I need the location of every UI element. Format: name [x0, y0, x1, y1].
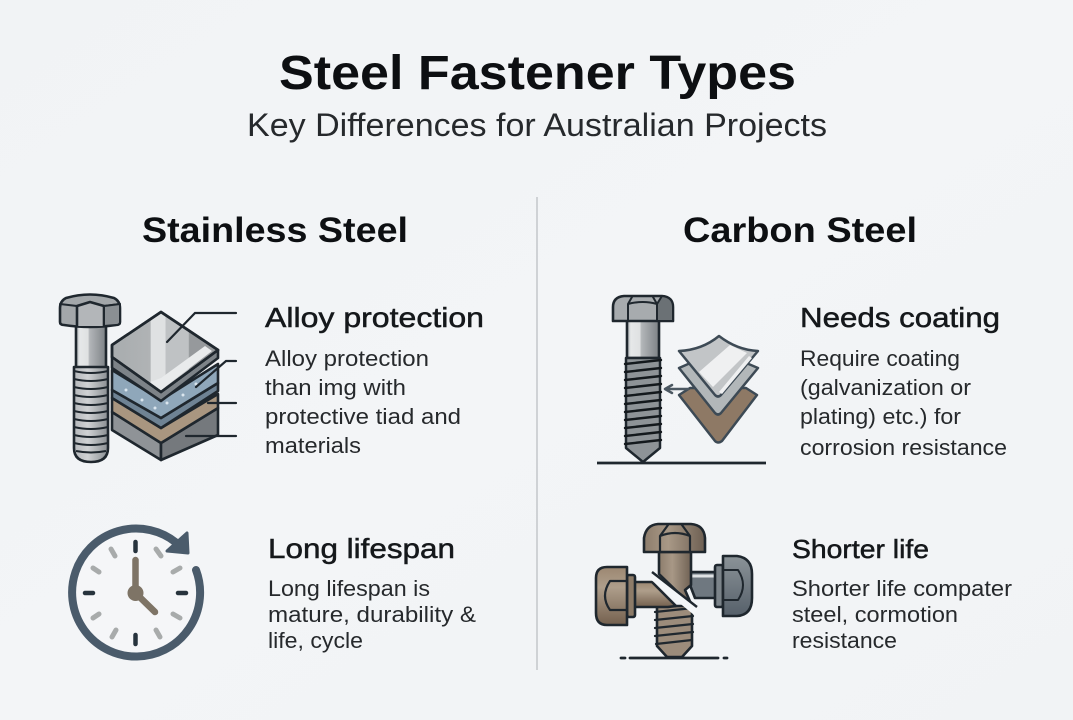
text block: needs coating: (galvanization or [800, 375, 971, 400]
text block: shorter life: steel, cormotion [792, 602, 958, 627]
text block: needs coating: plating) etc.) for [800, 404, 961, 429]
bolt head [60, 294, 120, 327]
panel: carbon steel [596, 211, 1012, 658]
heading: carbon steel: Carbon Steel [683, 211, 917, 250]
text block: alloy protection [265, 302, 484, 458]
text block: needs coating: Needs coating [800, 302, 1000, 333]
ground line [597, 462, 766, 464]
text block: long lifespan: mature, durability & [268, 602, 476, 627]
arrow [665, 385, 688, 393]
vertical bolt shank [659, 552, 692, 606]
text block: needs coating: corrosion resistance [800, 435, 1007, 460]
subtitle: Key Differences for Australian Projects [247, 107, 827, 143]
icon: stainless bolt and layered material [60, 294, 236, 462]
callout lines [167, 313, 236, 436]
text block: needs coating: Require coating [800, 346, 960, 371]
blue layer sparkles [124, 382, 198, 410]
icon: carbon bolt with coating sheets [597, 296, 766, 463]
text block: alloy protection: than img with [265, 375, 406, 400]
text block: shorter life [792, 534, 1012, 653]
text block: long lifespan: Long lifespan [268, 533, 455, 564]
diagonal slash [652, 576, 696, 612]
bolt head [613, 296, 673, 321]
coating sheets [679, 336, 758, 442]
text block: alloy protection: Alloy protection [265, 346, 429, 371]
panel: stainless steel [60, 211, 484, 657]
text block: long lifespan: Long lifespan is [268, 576, 430, 601]
right grey bolt [685, 556, 752, 616]
material layers [112, 312, 218, 460]
heading: stainless steel: Stainless Steel [142, 211, 408, 250]
icon: clock with circular arrow [72, 529, 200, 657]
bolt shank and thread [74, 326, 108, 462]
text block: alloy protection: materials [265, 433, 361, 458]
text block: needs coating [800, 302, 1007, 460]
ground line [621, 657, 727, 659]
text block: alloy protection: protective tiad and [265, 404, 461, 429]
lower thread [655, 606, 693, 657]
text block: shorter life: resistance [792, 628, 897, 653]
text block: alloy protection: Alloy protection [265, 302, 484, 333]
text block: shorter life: Shorter life compater [792, 576, 1012, 601]
text block: long lifespan: life, cycle [268, 628, 363, 653]
threaded shank [625, 320, 661, 462]
text block: shorter life: Shorter life [792, 534, 929, 564]
vertical bolt head [644, 524, 705, 552]
title: Steel Fastener Types [279, 47, 796, 100]
text block: long lifespan [268, 533, 476, 653]
left brown bolt [596, 567, 676, 625]
icon: rusted crossing bolts [596, 524, 752, 658]
